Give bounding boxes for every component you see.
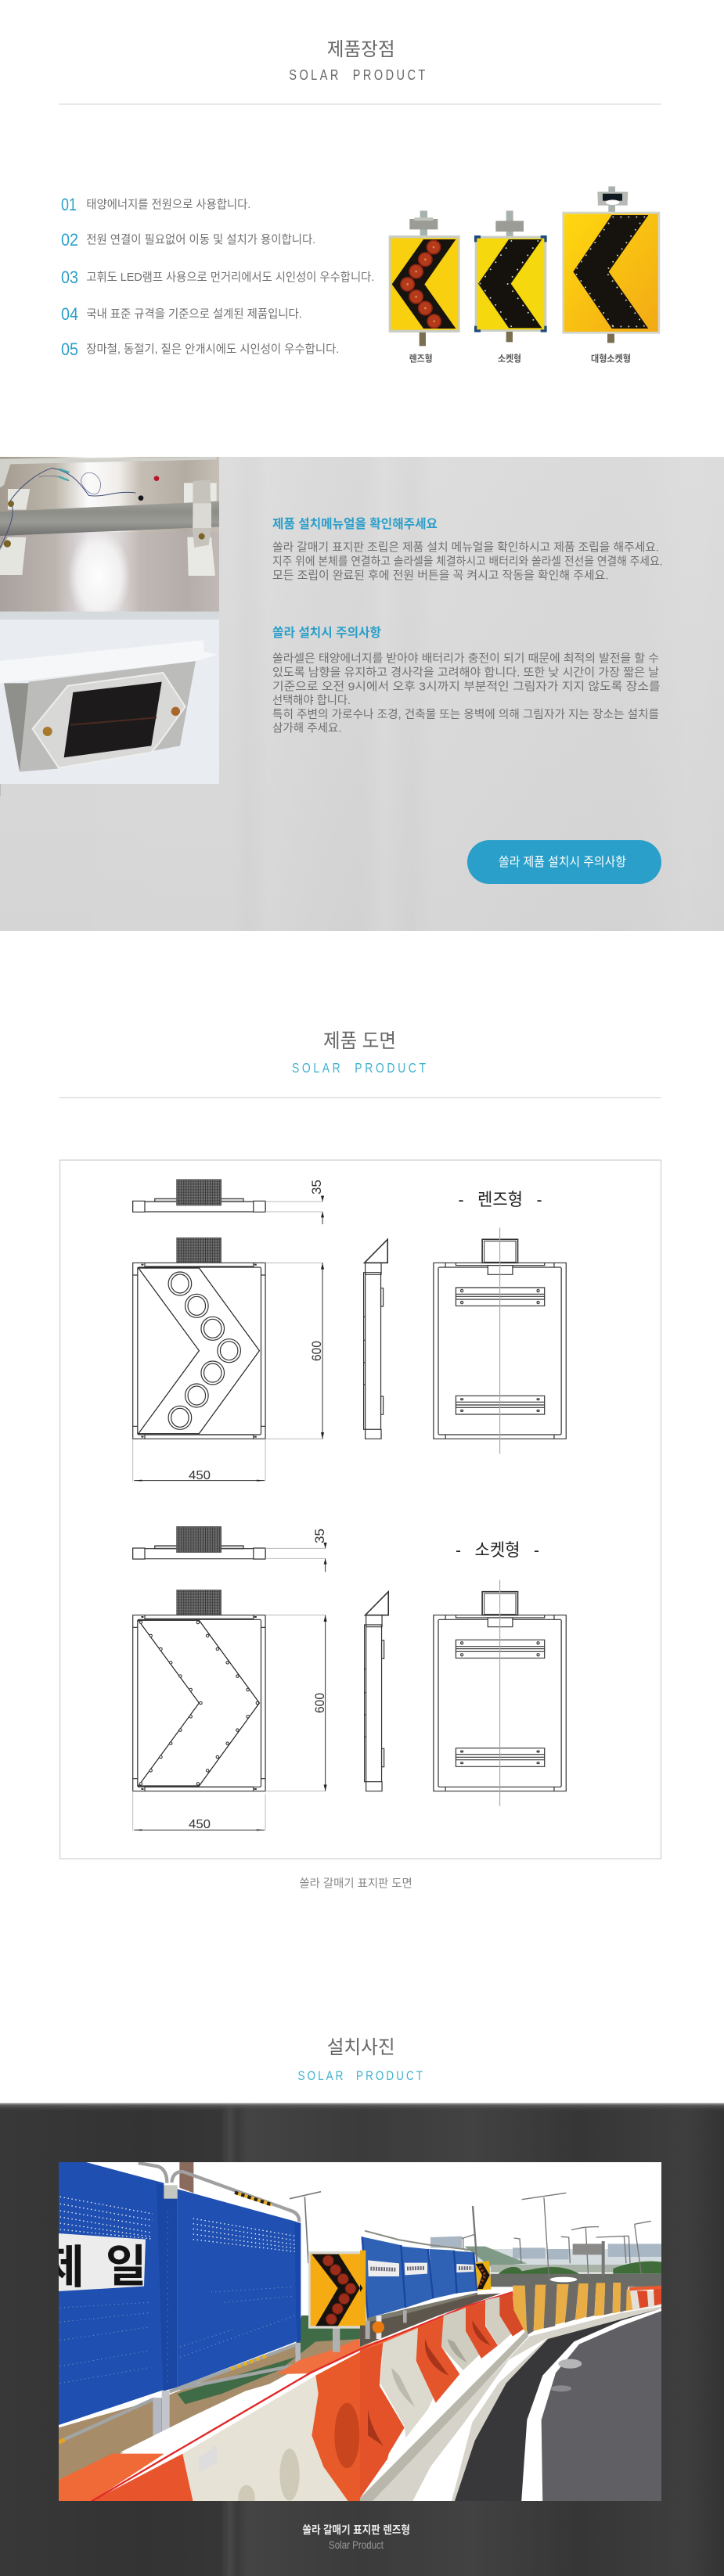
text block: manual [272, 541, 662, 582]
type label: - 렌즈형 - [459, 1190, 542, 1209]
photo subcaption: Solar Product [329, 2538, 384, 2551]
item 03: 03 [61, 268, 78, 287]
drawing: socket type [133, 1527, 566, 1831]
subtitle: SOLAR PRODUCT [297, 2069, 423, 2083]
dimension 450: 450 [189, 1818, 211, 1831]
item 02: 전원 연결이 필요없어 이동 및 설치가 용이합니다. [86, 233, 315, 246]
drawing: lens type [133, 1180, 566, 1482]
sign: socket type [474, 210, 547, 342]
text block: cautions: 특히 주변의 가로수나 조경, 건축물 또는 옹벽에 의해 그림자가 지는 장소는 설치를 [272, 708, 659, 721]
dimension 35: 35 [312, 1529, 327, 1543]
photo: solar module [0, 620, 219, 784]
views [133, 1180, 566, 1482]
photo caption: 쏠라 갈매기 표지판 렌즈형 [302, 2524, 410, 2536]
item 01 [61, 195, 250, 214]
dimension 600: 600 [309, 1341, 324, 1361]
button: 쏠라 제품 설치시 주의사항 [499, 855, 626, 869]
photo: roadside installation [42, 2162, 663, 2511]
dimension 35: 35 [309, 1180, 324, 1195]
left half of photo [42, 2162, 367, 2511]
item 05: 05 [61, 340, 78, 359]
title: 제품장점 [327, 39, 395, 60]
text block: manual: 지주 위에 본체를 연결하고 솔라셀을 체결하시고 배터리와 쏠라셀 전선을 연결해 주세요. [272, 555, 662, 568]
text block: manual: 모든 조립이 완료된 후에 전원 버튼을 꼭 켜시고 작동을 확인해 주세요. [272, 569, 609, 582]
text block: cautions: 쏠라셀은 태양에너지를 받아야 배터리가 충전이 되기 때문에 최적의 발전을 할 수 [272, 652, 659, 665]
panel: technical drawings [59, 1160, 661, 1859]
sign labels: 렌즈형 [409, 352, 433, 365]
section heading: drawings [292, 1030, 426, 1076]
item 05 [61, 340, 339, 359]
right half of photo [360, 2193, 663, 2503]
text block: manual: 쏠라 갈매기 표지판 조립은 제품 설치 메뉴얼을 확인하시고 제품 조립을 해주세요. [272, 541, 659, 554]
text block: cautions: 삼가해 주세요. [272, 721, 341, 735]
text block: cautions [272, 652, 661, 735]
heading: cautions: 쏠라 설치시 주의사항 [272, 626, 381, 640]
item 02: 02 [61, 230, 78, 250]
item 05: 장마철, 동절기, 짙은 안개시에도 시인성이 우수합니다. [86, 343, 339, 356]
dimension 600: 600 [312, 1693, 327, 1713]
views [133, 1527, 566, 1831]
sign labels [409, 352, 631, 365]
item 03 [61, 268, 374, 287]
sign labels: 소켓형 [498, 352, 521, 365]
text block: cautions: 있도록 남향을 유지하고 경사각을 고려해야 합니다. 또한 낮 시간이 가장 짧은 날 [272, 666, 659, 679]
title: 설치사진 [327, 2037, 395, 2058]
sign labels: 대형소켓형 [591, 352, 631, 365]
item 04: 04 [61, 304, 78, 324]
sign: lens type [389, 210, 460, 346]
sign: large socket type [562, 186, 660, 343]
subtitle: SOLAR PRODUCT [292, 1062, 426, 1076]
text block: cautions: 기준으로 오전 9시에서 오후 3시까지 부분적인 그림자가 지지 않도록 장소를 [272, 681, 661, 693]
title: 제품 도면 [323, 1030, 396, 1052]
section heading: installation photos [297, 2037, 423, 2083]
text block: cautions: 선택해야 합니다. [272, 694, 351, 707]
product signs [389, 186, 660, 365]
advantage list [61, 195, 374, 359]
section heading: product advantages [289, 39, 425, 83]
item 01: 태양에너지를 전원으로 사용합니다. [86, 198, 250, 211]
subtitle: SOLAR PRODUCT [289, 68, 425, 83]
sign text in photo: 제 [42, 2243, 85, 2294]
button [467, 840, 661, 884]
type label: - 소켓형 - [456, 1540, 539, 1560]
heading: check manual: 제품 설치메뉴얼을 확인해주세요 [272, 517, 438, 531]
photo: back of sign with pipe [0, 457, 219, 623]
left half of photo: 일 [106, 2243, 146, 2292]
item 03: 고휘도 LED램프 사용으로 먼거리에서도 시인성이 우수합니다. [86, 271, 374, 284]
item 04: 국내 표준 규격을 기준으로 설계된 제품입니다. [86, 307, 302, 321]
item 01: 01 [61, 195, 77, 214]
drawing caption: 쏠라 갈매기 표지판 도면 [299, 1877, 412, 1890]
item 02 [61, 230, 315, 250]
dimension 450: 450 [189, 1469, 211, 1482]
item 04 [61, 304, 302, 324]
panel: dark installation photo band [0, 2103, 724, 2576]
panel: installation guide band [0, 457, 724, 931]
